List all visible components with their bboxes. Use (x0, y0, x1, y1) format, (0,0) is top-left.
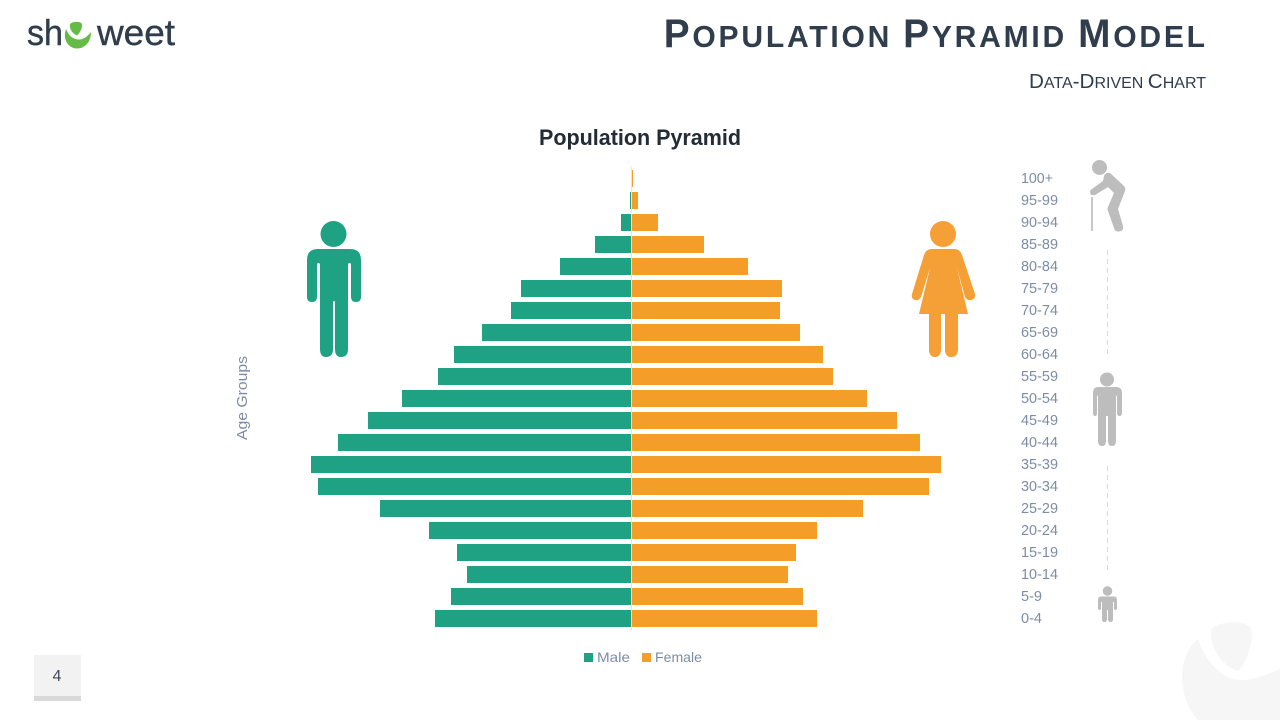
legend: Male (597, 649, 630, 665)
age group labels: 20-24 (1021, 523, 1058, 539)
logo: showeet (27, 12, 175, 53)
age group labels: 55-59 (1021, 369, 1058, 385)
page number box: 4 (53, 668, 62, 685)
age group labels: 100+ (1021, 171, 1053, 187)
axis title: age groups: Age Groups (235, 356, 251, 440)
legend: Female (655, 649, 702, 665)
watermark logo (1182, 622, 1280, 720)
age group labels: 5-9 (1021, 589, 1042, 605)
age group labels: 70-74 (1021, 303, 1058, 319)
connector: upper dashed line (1106, 250, 1108, 355)
age group labels: 80-84 (1021, 259, 1058, 275)
icon: male figure (307, 221, 361, 357)
icon: elderly figure with cane (1090, 160, 1125, 232)
icon: female figure (912, 221, 975, 357)
age group labels (1021, 171, 1058, 627)
age group labels: 30-34 (1021, 479, 1058, 495)
connector: lower dashed line (1106, 466, 1108, 570)
age group labels: 75-79 (1021, 281, 1058, 297)
age group labels: 10-14 (1021, 567, 1058, 583)
bar chart: female bars (632, 170, 941, 627)
logo: showeet: weet (96, 12, 175, 53)
page number box (34, 655, 81, 701)
age group labels: 50-54 (1021, 391, 1058, 407)
legend (584, 649, 702, 665)
logo: showeet: sh (27, 12, 63, 53)
age group labels: 45-49 (1021, 413, 1058, 429)
age group labels: 60-64 (1021, 347, 1058, 363)
age group labels: 0-4 (1021, 611, 1042, 627)
age group labels: 95-99 (1021, 193, 1058, 209)
bar chart: male bars (311, 192, 632, 627)
age group labels: 40-44 (1021, 435, 1058, 451)
age group labels: 65-69 (1021, 325, 1058, 341)
age group labels: 35-39 (1021, 457, 1058, 473)
age group labels: 15-19 (1021, 545, 1058, 561)
subtitle: DATA-DRIVEN CHART (1029, 71, 1207, 93)
age group labels: 25-29 (1021, 501, 1058, 517)
age group labels: 90-94 (1021, 215, 1058, 231)
age group labels: 85-89 (1021, 237, 1058, 253)
title: POPULATION PYRAMID MODEL (664, 11, 1205, 56)
chart title: Population Pyramid (539, 125, 741, 150)
icon: child figure (1098, 586, 1117, 622)
icon: adult figure (1093, 372, 1122, 446)
